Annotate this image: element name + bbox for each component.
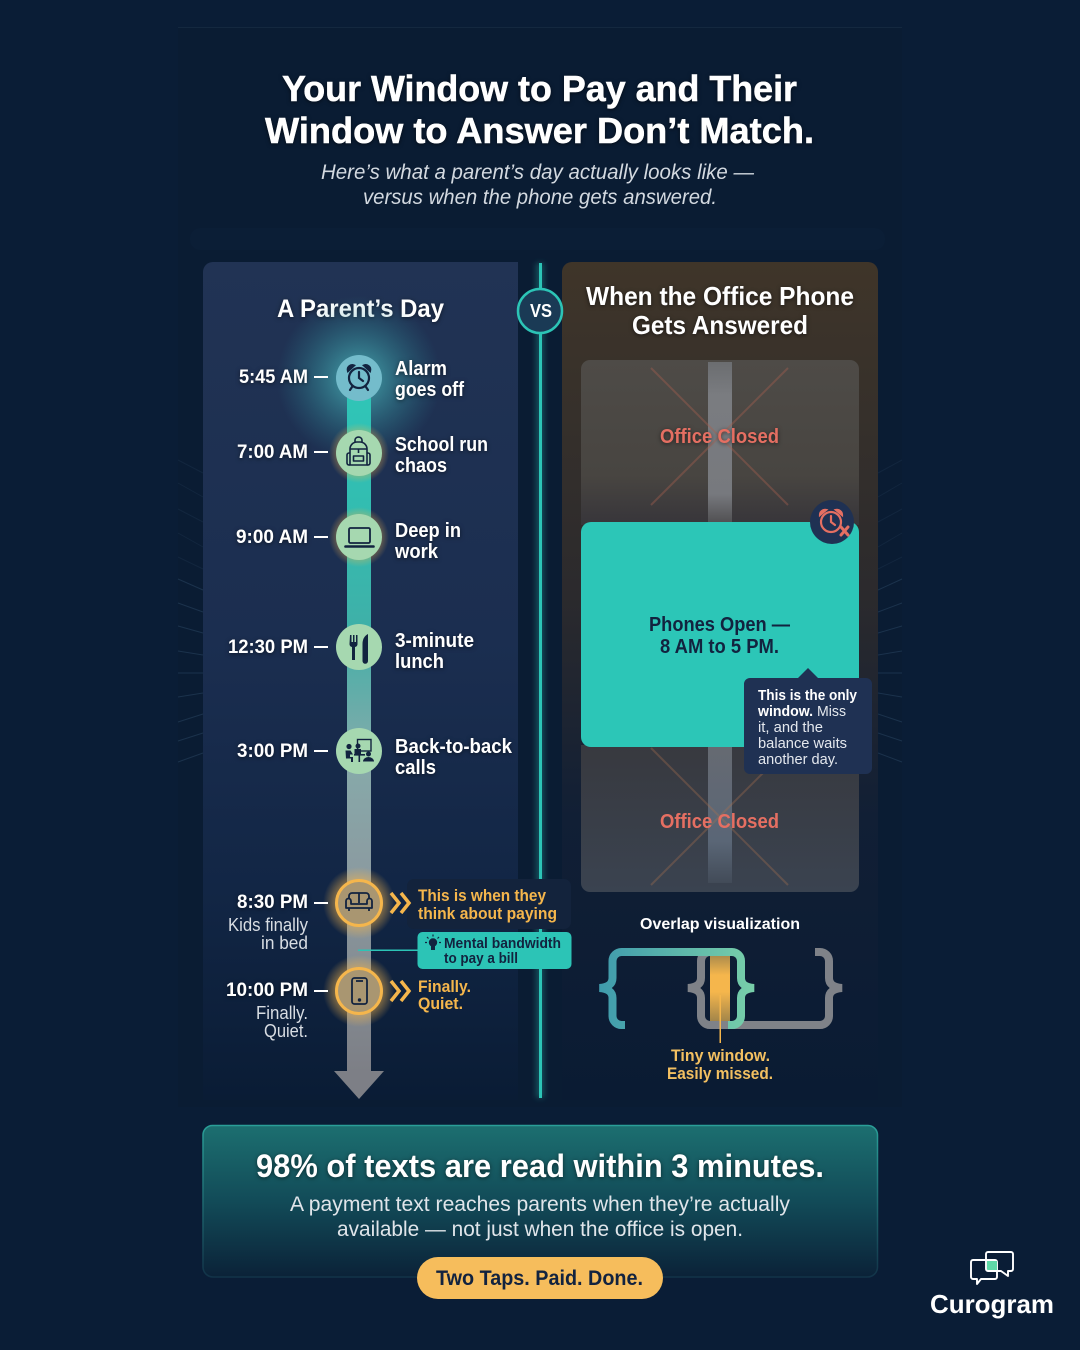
overlap visualization (600, 916, 842, 1083)
button: two taps (417, 1257, 663, 1299)
caption: tiny window: Tiny window. (671, 1047, 770, 1065)
subtitle (321, 161, 755, 209)
center divider line (536, 263, 544, 1098)
block: office closed evening (581, 745, 859, 892)
timeline item: 5:45 AM alarm: Alarm (395, 358, 447, 380)
timeline item: 10:00 PM finally quiet: Finally. (256, 1003, 308, 1023)
heading: overlap visualization: Overlap visualization (640, 916, 800, 933)
icon: double chevron (391, 981, 409, 1001)
timeline item: 5:45 AM alarm: 5:45 AM (239, 367, 308, 388)
timeline item: 12:30 PM lunch: 3-minute (395, 630, 474, 652)
heading: when the office phone gets answered (586, 281, 854, 340)
timeline item: 10:00 PM finally quiet (226, 955, 395, 1041)
timeline item: 12:30 PM lunch: 12:30 PM (228, 637, 308, 658)
panel: a parent's day (203, 262, 518, 1100)
panel: office phone (562, 262, 878, 1100)
timeline item: 9:00 AM deep work: 9:00 AM (236, 527, 308, 548)
callout: when they think about paying: think about paying (418, 904, 557, 923)
callout: only window: it, and the (758, 719, 823, 736)
timeline item: 9:00 AM deep work (236, 507, 461, 567)
callout: finally quiet: Quiet. (418, 994, 463, 1013)
timeline item: 8:30 PM kids in bed (228, 867, 395, 953)
callout: only window (744, 668, 872, 774)
timeline item: 7:00 AM school run: School run (395, 434, 488, 456)
logo: curogram (930, 1252, 1054, 1319)
icon: backpack (347, 437, 370, 465)
block: office closed evening: Office Closed (660, 811, 779, 833)
overlap highlight (710, 955, 730, 1022)
title: Window to Answer Don’t Match. (265, 110, 814, 151)
vs badge: VS (530, 301, 552, 321)
block: phones open: Phones Open — (649, 614, 790, 636)
callout: only window: another day. (758, 751, 838, 768)
stat body: A payment text reaches parents when they’re actually (290, 1193, 790, 1216)
stat body (290, 1193, 790, 1241)
callout: only window: balance waits (758, 735, 847, 752)
callout: only window: This is the only (758, 687, 858, 704)
block: phones open (581, 522, 859, 747)
block: office closed morning: Office Closed (660, 426, 779, 448)
timeline item: 8:30 PM kids in bed: 8:30 PM (237, 892, 308, 913)
timeline item: 10:00 PM finally quiet: 10:00 PM (226, 980, 308, 1001)
timeline item: 9:00 AM deep work: Deep in (395, 520, 461, 542)
caption: tiny window (667, 1047, 773, 1083)
office hours bracket (688, 952, 842, 1025)
icon: sofa (346, 893, 372, 911)
stat body: available — not just when the office is open. (337, 1218, 743, 1241)
callout: when they think about paying (391, 879, 571, 929)
block: phones open: 8 AM to 5 PM. (660, 636, 779, 658)
icon: phone (352, 978, 367, 1004)
logo: curogram: Curogram (930, 1289, 1054, 1319)
timeline item: 3:00 PM calls: Back-to-back (395, 736, 513, 758)
timeline item: 8:30 PM kids in bed: in bed (261, 933, 308, 953)
heading: a parent's day: A Parent’s Day (277, 295, 444, 323)
callout: mental bandwidth (358, 932, 572, 969)
timeline bar with arrow (334, 378, 384, 1099)
icon: laptop (346, 528, 374, 546)
timeline glow (277, 296, 441, 460)
icon: double chevron (391, 893, 409, 913)
timeline item: 7:00 AM school run: chaos (395, 455, 447, 477)
timeline item: 7:00 AM school run: 7:00 AM (237, 442, 308, 463)
timeline item: 12:30 PM lunch: lunch (395, 651, 444, 673)
subtitle: versus when the phone gets answered. (363, 186, 717, 209)
parent availability bracket (600, 952, 754, 1025)
title: Your Window to Pay and Their (282, 68, 797, 109)
icon: chat bubbles (971, 1252, 1013, 1284)
vs badge (518, 289, 562, 333)
icon: meeting (346, 740, 374, 762)
subtitle: Here’s what a parent’s day actually looks like — (321, 161, 755, 184)
timeline item: 12:30 PM lunch (228, 624, 474, 673)
timeline item: 3:00 PM calls: calls (395, 757, 436, 779)
callout: mental bandwidth: Mental bandwidth (444, 936, 561, 952)
stat headline: 98% of texts are read within 3 minutes. (256, 1148, 824, 1184)
heading: when the office phone gets answered: Gets Answered (632, 310, 808, 340)
timeline item: 7:00 AM school run (237, 423, 488, 483)
callout: mental bandwidth: to pay a bill (444, 951, 518, 967)
callout: finally quiet: Finally. (418, 977, 471, 996)
pointer line (720, 995, 721, 1043)
timeline item: 5:45 AM alarm (239, 355, 464, 401)
icon: light bulb (425, 934, 441, 950)
callout: only window: window. Miss (757, 703, 846, 720)
button: two taps: Two Taps. Paid. Done. (436, 1267, 643, 1290)
timeline item: 8:30 PM kids in bed: Kids finally (228, 915, 308, 935)
heading: when the office phone gets answered: When the Office Phone (586, 281, 854, 311)
title (265, 68, 814, 151)
icon: alarm clock (348, 365, 370, 390)
timeline item: 3:00 PM calls (237, 728, 513, 779)
callout: when they think about paying: This is when they (418, 886, 546, 905)
timeline item: 3:00 PM calls: 3:00 PM (237, 741, 308, 762)
callout: finally quiet (391, 977, 471, 1013)
stat panel (203, 1125, 877, 1277)
caption: tiny window: Easily missed. (667, 1065, 773, 1083)
timeline item: 5:45 AM alarm: goes off (395, 379, 464, 401)
timeline item: 9:00 AM deep work: work (394, 541, 439, 563)
icon: alarm off badge (810, 500, 854, 544)
timeline item: 10:00 PM finally quiet: Quiet. (264, 1021, 308, 1041)
block: office closed morning (581, 360, 859, 527)
icon: fork and knife (349, 634, 368, 664)
